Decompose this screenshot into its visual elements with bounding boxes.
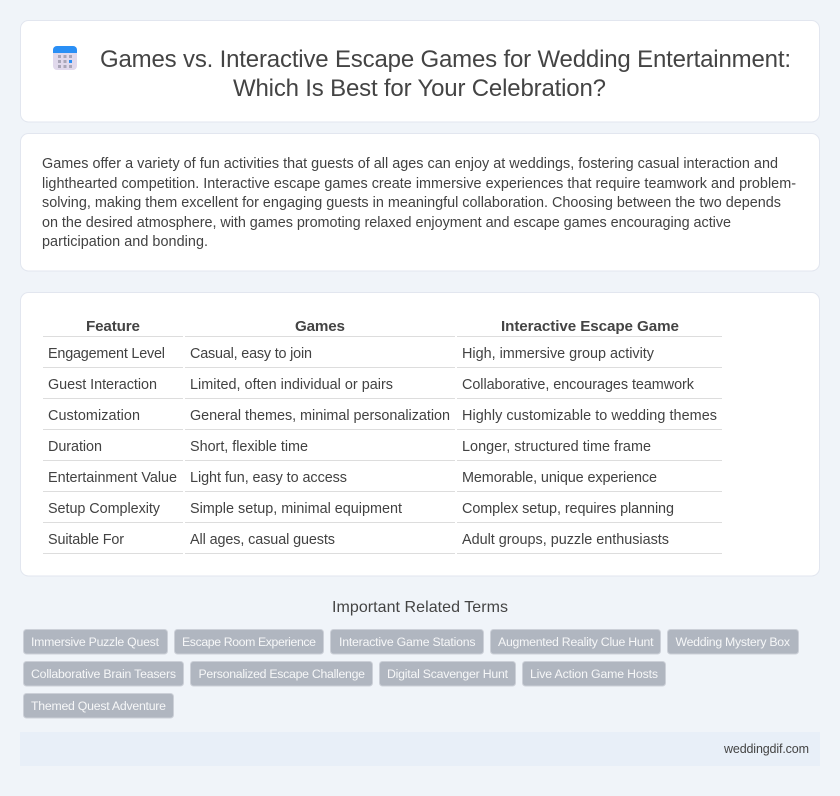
footer: weddingdif.com: [723, 742, 809, 756]
text block: description paragraph: participation and bonding.: [42, 234, 208, 250]
row: customization: [48, 408, 717, 424]
tag: Immersive Puzzle Quest: [31, 635, 160, 649]
row: customization: Highly customizable to wedding themes: [462, 408, 717, 424]
row: suitable for: Suitable For: [48, 532, 124, 548]
icon: calendar: [53, 46, 77, 70]
tag: [190, 662, 372, 686]
tag: [668, 630, 798, 654]
row: engagement level: High, immersive group activity: [462, 346, 655, 362]
tag: [24, 630, 168, 654]
text block: description paragraph: Games offer a variety of fun activities that guests of all ages can enjoy at weddings, fostering casual interaction and: [42, 156, 778, 172]
tag: Themed Quest Adventure: [31, 699, 166, 713]
tag: Live Action Game Hosts: [530, 667, 658, 681]
text block: description paragraph: lighthearted competition. Interactive escape games create immersive experiences that require teamwork and problem-: [42, 176, 796, 192]
row: entertainment value: [48, 470, 657, 486]
tag: Augmented Reality Clue Hunt: [498, 635, 654, 649]
tag: Interactive Game Stations: [339, 635, 476, 649]
panel: comparison table: [20, 292, 820, 576]
tag: [24, 694, 174, 718]
tag: Digital Scavenger Hunt: [387, 667, 509, 681]
row: engagement level: Engagement Level: [48, 346, 165, 362]
row: guest interaction: Collaborative, encourages teamwork: [462, 377, 695, 393]
text block: description paragraph: [42, 156, 796, 250]
row: setup complexity: Setup Complexity: [48, 501, 161, 517]
text block: description paragraph: on the desired atmosphere, with games promoting relaxed enjoyment and escape games encouraging active: [42, 215, 731, 231]
heading: important related terms: Important Related Terms: [332, 599, 508, 616]
tag: [380, 662, 516, 686]
footer: [20, 732, 820, 766]
row: entertainment value: Light fun, easy to access: [190, 470, 347, 486]
tag: [174, 630, 324, 654]
table header: Interactive Escape Game: [501, 318, 679, 335]
tag: Personalized Escape Challenge: [198, 667, 365, 681]
row: entertainment value: Memorable, unique experience: [462, 470, 657, 486]
panel: description: [20, 134, 820, 271]
row: customization: General themes, minimal personalization: [190, 408, 450, 424]
tag: Wedding Mystery Box: [676, 635, 791, 649]
panel: title card: [20, 20, 820, 122]
tag: [490, 630, 660, 654]
tag: [522, 662, 666, 686]
table header: Feature: [86, 318, 140, 335]
row: guest interaction: Guest Interaction: [48, 377, 157, 393]
row: setup complexity: Simple setup, minimal equipment: [190, 501, 402, 517]
row: guest interaction: [48, 377, 695, 393]
row: suitable for: All ages, casual guests: [190, 532, 335, 548]
row: duration: Short, flexible time: [190, 439, 308, 455]
title: Games vs. Interactive Escape Games for Wedding Entertainment:: [100, 46, 791, 73]
row: suitable for: Adult groups, puzzle enthusiasts: [462, 532, 669, 548]
tag: Collaborative Brain Teasers: [31, 667, 176, 681]
tag: Escape Room Experience: [182, 635, 316, 649]
row: duration: Duration: [48, 439, 102, 455]
panel: related term tags: [24, 630, 798, 718]
tag: [330, 630, 484, 654]
row: entertainment value: Entertainment Value: [48, 470, 177, 486]
row: customization: Customization: [48, 408, 140, 424]
title: [100, 46, 791, 102]
row: duration: Longer, structured time frame: [462, 439, 651, 455]
text block: description paragraph: solving, making them excellent for engaging guests in meaningful collaboration. Choosing between the two depends: [42, 195, 781, 211]
row: setup complexity: [48, 501, 674, 517]
row: engagement level: Casual, easy to join: [190, 346, 312, 362]
title: Which Is Best for Your Celebration?: [233, 75, 606, 102]
table header: [86, 318, 679, 335]
table header: Games: [295, 318, 345, 335]
row: guest interaction: Limited, often individual or pairs: [190, 377, 393, 393]
tag: [24, 662, 184, 686]
row: engagement level: [48, 346, 655, 362]
row: setup complexity: Complex setup, requires planning: [462, 501, 674, 517]
row: duration: [48, 439, 651, 455]
row: suitable for: [48, 532, 669, 548]
